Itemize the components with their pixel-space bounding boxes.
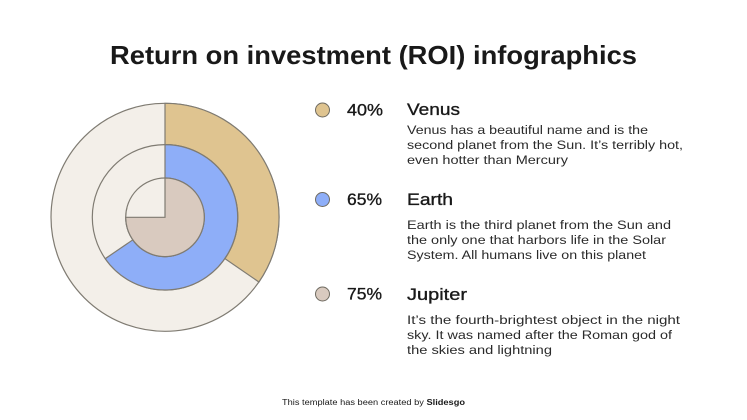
outer ring segment: Venus (165, 103, 279, 282)
heading: Earth: Earth (407, 190, 453, 209)
title: Return on investment (ROI) infographics (110, 40, 637, 70)
heading: Jupiter: Jupiter (407, 285, 467, 304)
marker: Earth (316, 192, 330, 206)
description: Jupiter (407, 313, 681, 357)
description: Venus: second planet from the Sun. It’s terribly hot, (407, 138, 683, 152)
chart: concentric ring pie (51, 103, 279, 331)
description: Venus: Venus has a beautiful name and is the (407, 123, 648, 137)
value: Earth: 65% (347, 190, 382, 209)
heading: Venus: Venus (407, 100, 460, 119)
description: Venus (407, 123, 683, 167)
inner circle background (126, 178, 204, 257)
legend row: Jupiter (316, 284, 681, 357)
footer credit: This template has been created by Slidesgo (282, 398, 465, 407)
legend row: Venus (316, 100, 683, 167)
value: Venus: 40% (347, 100, 383, 120)
middle ring segment: Earth (105, 145, 238, 290)
middle ring background (92, 145, 238, 290)
legend row: Earth (316, 190, 671, 262)
marker: Jupiter (316, 287, 330, 301)
description: Earth: System. All humans live on this planet (407, 248, 647, 262)
marker: Venus (316, 103, 330, 117)
description: Earth: the only one that harbors life in the Solar (407, 233, 666, 247)
description: Jupiter: the skies and lightning (407, 343, 552, 357)
inner segment: Jupiter (126, 178, 204, 257)
description: Earth: Earth is the third planet from the Sun and (407, 218, 671, 232)
value: Jupiter: 75% (347, 284, 382, 304)
description: Jupiter: sky. It was named after the Roman god of (407, 328, 673, 342)
outer ring background (51, 103, 279, 331)
description: Earth (407, 218, 671, 262)
description: Venus: even hotter than Mercury (407, 153, 569, 167)
description: Jupiter: It’s the fourth-brightest object in the night (407, 313, 681, 327)
